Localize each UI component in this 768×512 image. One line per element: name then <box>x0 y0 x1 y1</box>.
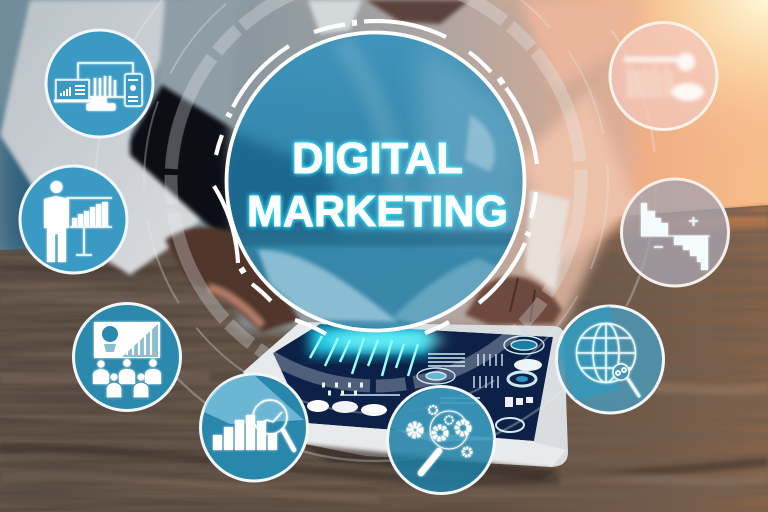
icon: presenter with bar chart <box>20 166 127 273</box>
title: MARKETING <box>247 187 508 236</box>
icon: gears with magnifier <box>388 386 494 494</box>
lens outline <box>226 32 524 330</box>
left hand <box>165 227 300 332</box>
icon: audience and presentation board <box>74 304 180 410</box>
icon: faded chart and person <box>610 22 717 130</box>
icon: devices with charts <box>46 30 153 137</box>
icon: downward chart with plus and minus <box>622 179 728 286</box>
icon: bar chart with magnifier <box>200 374 308 481</box>
shirt sleeve left <box>0 0 300 275</box>
wood table <box>0 200 768 512</box>
tablet with dashboard <box>243 322 568 480</box>
lens fill <box>226 32 524 330</box>
title: DIGITAL <box>292 134 463 183</box>
dark suit sleeve <box>130 85 245 240</box>
tablet screen <box>273 324 553 441</box>
dashed outer ring <box>214 21 537 334</box>
central lens with title <box>214 21 537 334</box>
title <box>247 134 508 236</box>
right hand <box>465 276 562 325</box>
icon: globe with magnifier <box>556 306 664 413</box>
tablet body <box>243 322 568 467</box>
shirt torso <box>230 0 640 330</box>
decorative HUD rings behind title <box>96 0 656 461</box>
